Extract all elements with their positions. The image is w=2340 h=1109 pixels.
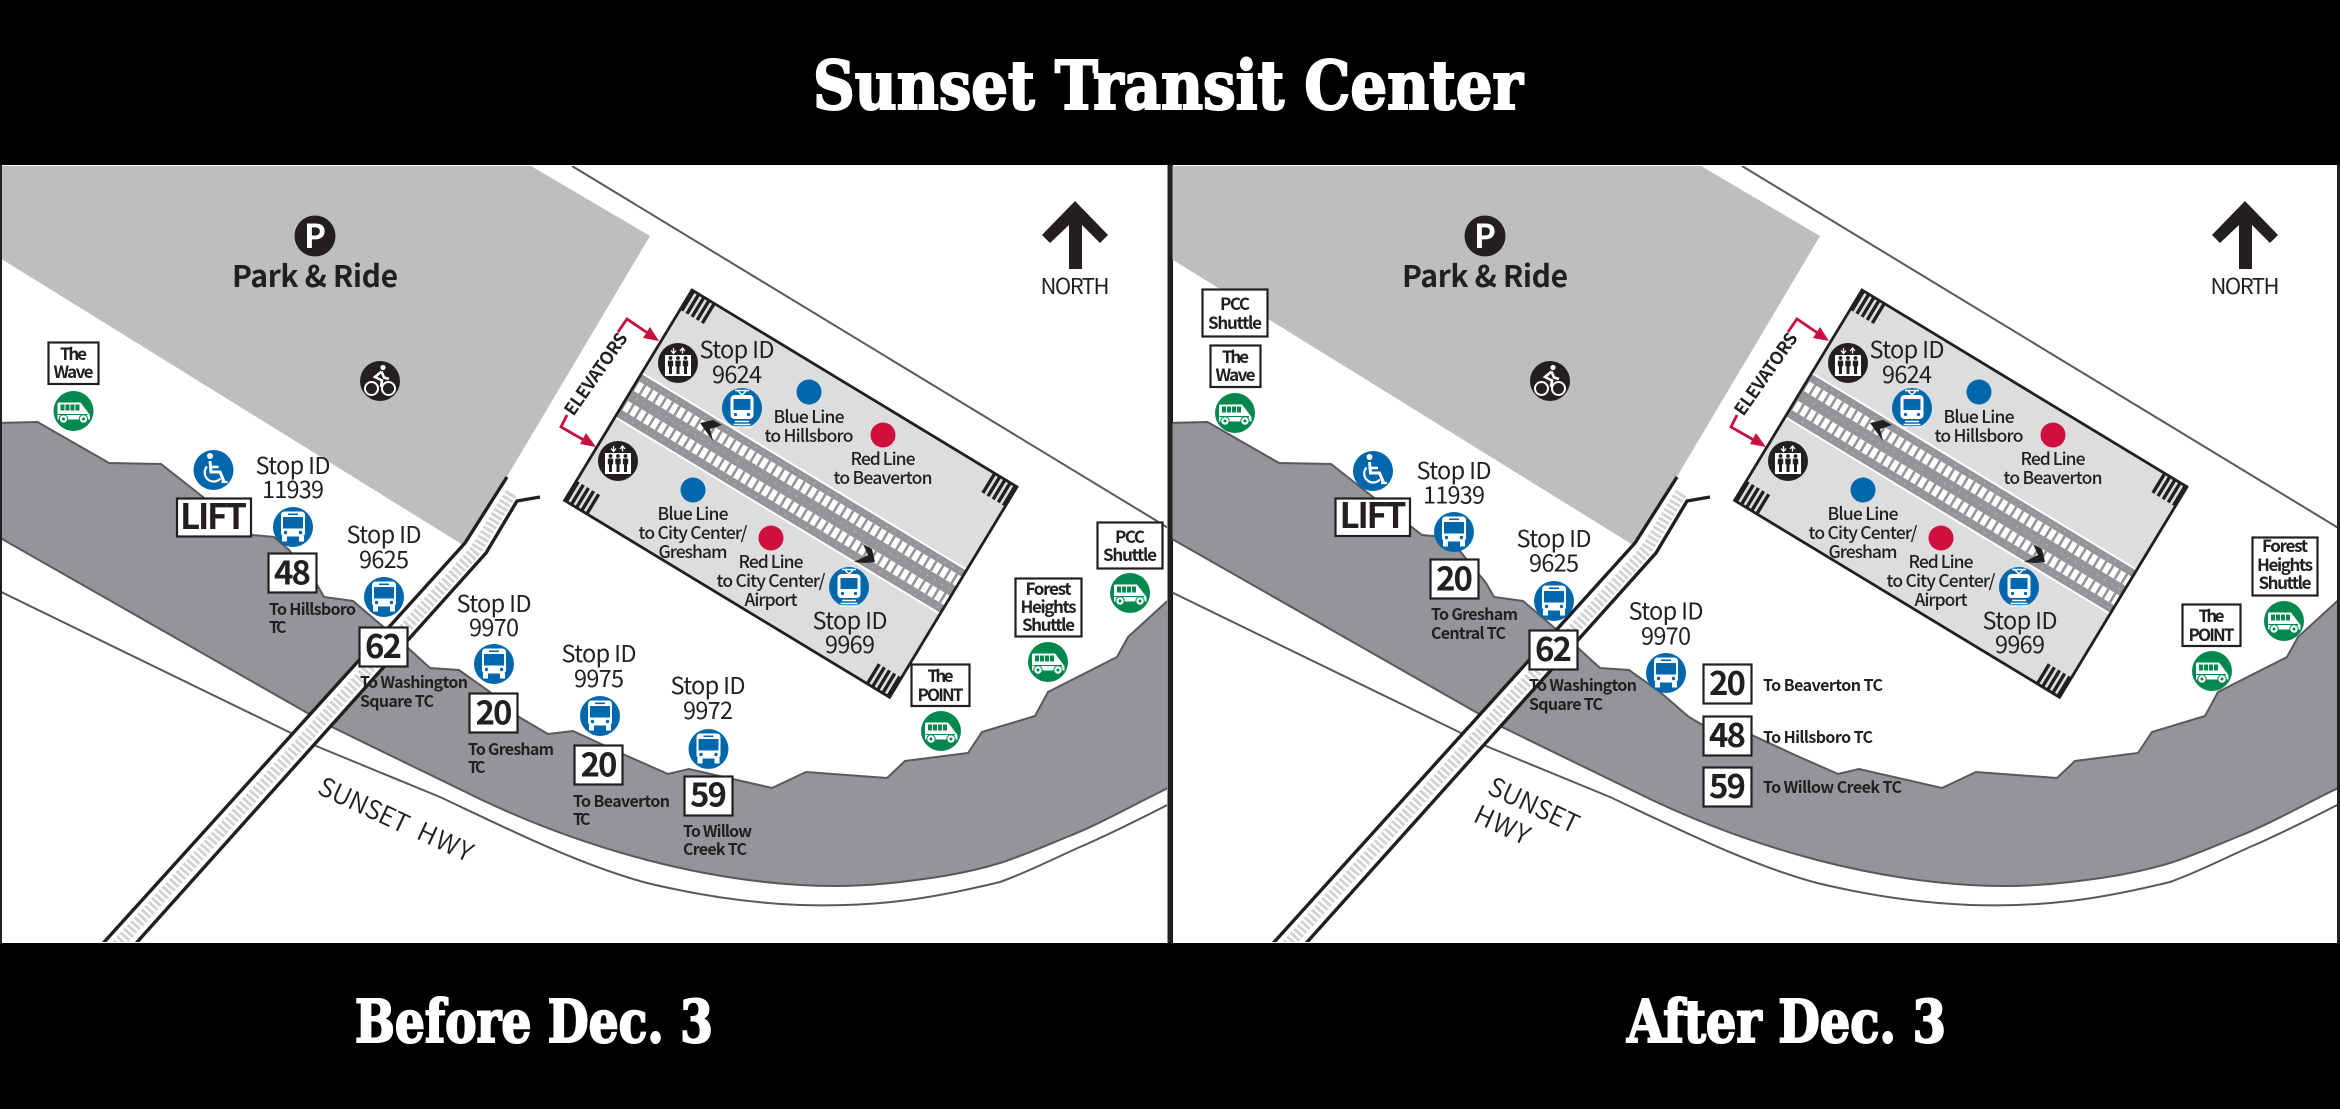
- stop 9625 line 62: Square TC: [360, 688, 434, 712]
- stop 9624 max station: [700, 331, 774, 428]
- stop 9975 line 20: 9975: [574, 660, 624, 694]
- stop 9969 max station: [1982, 567, 2058, 660]
- the point stop: [2182, 602, 2240, 691]
- stop 9624 max station: Stop ID: [700, 331, 774, 365]
- line 20 to Beaverton: 20: [1709, 657, 1746, 705]
- icon: elevator north: [1828, 343, 1868, 383]
- line 59 to Willow Creek: [1704, 760, 1902, 808]
- elevator arrows: [1731, 319, 1829, 447]
- stop 9969 max station: 9969: [825, 626, 875, 660]
- line 48 to Hillsboro: To Hillsboro TC: [1763, 724, 1874, 748]
- forest heights shuttle stop: Forest: [2262, 532, 2308, 557]
- stop 9969 max station: [812, 567, 888, 660]
- stop 11939 line 48: TC: [269, 614, 287, 638]
- stop 9625 line 62: 62: [1535, 623, 1572, 671]
- platform: [565, 290, 1017, 697]
- stop 9970 line 20: TC: [468, 754, 486, 778]
- the point stop: The: [2198, 602, 2225, 627]
- stop 9624 max station: [1870, 331, 1944, 428]
- north label: NORTH: [2210, 269, 2280, 301]
- panel: before Dec. 3 map: [0, 165, 1175, 950]
- highway label: HWY: [412, 812, 480, 870]
- red line to City Center: Red Line: [1908, 549, 1974, 574]
- stop 9975 line 20: Stop ID: [562, 635, 636, 669]
- icon: bike parking: [1530, 361, 1570, 401]
- stop 9625 line 62: 9625: [1529, 544, 1579, 578]
- the point stop: POINT: [918, 681, 964, 706]
- icon: elevator south: [598, 441, 638, 481]
- pcc shuttle label: Shuttle: [1208, 309, 1262, 334]
- north arrow: [2212, 201, 2278, 269]
- stop 11939 line 20: 20: [1436, 552, 1473, 600]
- the point stop: [912, 662, 970, 751]
- forest heights shuttle stop: Heights: [1020, 593, 1076, 618]
- the wave stop: The: [60, 340, 87, 365]
- blue line to Hillsboro: Blue Line: [774, 404, 845, 429]
- the point stop: The: [928, 662, 954, 687]
- lift stop: LIFT: [180, 489, 247, 540]
- icon: bike parking: [360, 361, 400, 401]
- red line to City Center: [716, 526, 826, 612]
- stop 9625 line 62: To Washington: [360, 669, 468, 693]
- red line to City Center: Airport: [1914, 587, 1968, 612]
- red line to City Center: to City Center/: [1886, 568, 1996, 593]
- forest heights shuttle stop: [2252, 532, 2318, 641]
- stop 11939 line 20: To Gresham: [1431, 601, 1518, 625]
- panel frame: [0, 165, 2340, 943]
- stop 9625 line 62: 9625: [359, 541, 409, 575]
- red line to Beaverton: to Beaverton: [834, 465, 932, 490]
- stop 9970 line 20: 20: [476, 686, 512, 734]
- stop 9975 line 20: [562, 635, 670, 830]
- parking lot, bus pavement, highway and rail: [0, 166, 1175, 950]
- blue line to City Center: [638, 478, 748, 564]
- stop 9975 line 20: TC: [573, 806, 591, 830]
- pcc shuttle stop: PCC: [1115, 523, 1145, 548]
- line 20 to Beaverton: To Beaverton TC: [1763, 672, 1884, 696]
- highway label: SUNSET: [313, 767, 416, 841]
- stop 11939 line 20: 11939: [1423, 476, 1485, 510]
- blue line to City Center: [1808, 478, 1918, 564]
- panel: after Dec. 3 map: [1165, 165, 2340, 950]
- stop 11939 line 48: To Hillsboro: [269, 596, 356, 620]
- pcc shuttle stop: [1098, 522, 1162, 613]
- stop 9972 line 59: 9972: [683, 692, 733, 726]
- forest heights shuttle stop: Shuttle: [1022, 611, 1075, 636]
- pcc shuttle label: [1202, 290, 1268, 336]
- platform: [1735, 290, 2187, 697]
- red line to Beaverton: [834, 422, 932, 490]
- forest heights shuttle stop: Forest: [1026, 575, 1072, 600]
- stop 9969 max station: Stop ID: [812, 602, 888, 636]
- line 48 to Hillsboro: [1704, 709, 1874, 757]
- stop 9969 max station: Stop ID: [1982, 602, 2058, 636]
- the wave stop: [48, 340, 98, 431]
- the wave stop: Wave: [1216, 361, 1256, 386]
- elevators label: ELEVATORS: [1728, 327, 1803, 420]
- forest heights shuttle stop: Shuttle: [2258, 569, 2312, 594]
- stop 9972 line 59: Creek TC: [683, 836, 748, 860]
- stop 9625 line 62: Stop ID: [1516, 520, 1592, 554]
- stop 9972 line 59: 59: [690, 768, 727, 816]
- stop 11939 line 20: Stop ID: [1416, 452, 1492, 486]
- stop 9970: Stop ID: [1628, 592, 1704, 626]
- park and ride label: Park & Ride: [232, 252, 398, 296]
- line 20 to Beaverton: [1704, 657, 1884, 705]
- blue line to City Center: Blue Line: [1828, 501, 1899, 526]
- stop 9970 line 20: [456, 585, 554, 778]
- stop 9970: [1628, 592, 1704, 693]
- park and ride label: Park & Ride: [1402, 252, 1568, 296]
- forest heights shuttle stop: Heights: [2257, 551, 2313, 576]
- blue line to Hillsboro: to Hillsboro: [1934, 423, 2024, 448]
- stop 11939 line 48: 11939: [262, 471, 324, 505]
- stop 9625 line 62: [1516, 520, 1637, 715]
- red line to Beaverton: Red Line: [2020, 446, 2086, 471]
- caption: before: Before Dec. 3: [355, 987, 713, 1056]
- pcc shuttle label: PCC: [1220, 290, 1250, 315]
- lift stop: [1336, 451, 1410, 539]
- icon: elevator north: [658, 343, 698, 383]
- stop 9972 line 59: [670, 667, 752, 860]
- blue line to City Center: Gresham: [658, 539, 728, 564]
- icon: parking: [1464, 210, 1506, 258]
- blue line to City Center: to City Center/: [638, 520, 748, 545]
- stop 9970 line 20: Stop ID: [456, 585, 532, 619]
- the wave stop: The: [1222, 343, 1249, 368]
- blue line to Hillsboro: [1934, 380, 2024, 448]
- stop 9624 max station: 9624: [1882, 356, 1932, 390]
- stop 9625 line 62: Square TC: [1529, 691, 1604, 715]
- highway label: HWY: [1469, 795, 1537, 853]
- lift stop: LIFT: [1340, 488, 1406, 539]
- caption: after: After Dec. 3: [1626, 987, 1946, 1056]
- forest heights shuttle stop: [1016, 575, 1082, 682]
- red line to City Center: Red Line: [738, 549, 804, 574]
- the point stop: POINT: [2188, 621, 2235, 646]
- red line to Beaverton: to Beaverton: [2004, 465, 2102, 490]
- blue line to City Center: to City Center/: [1808, 520, 1918, 545]
- stop 9625 line 62: To Washington: [1529, 672, 1637, 696]
- stop 9975 line 20: To Beaverton: [573, 788, 670, 812]
- stop 11939 line 48: Stop ID: [256, 447, 330, 481]
- blue line to Hillsboro: Blue Line: [1944, 404, 2015, 429]
- red line to Beaverton: [2004, 422, 2102, 490]
- title: Sunset Transit Center: [813, 46, 1524, 125]
- red line to City Center: Airport: [744, 587, 798, 612]
- the wave stop: [1210, 343, 1260, 433]
- line 48 to Hillsboro: 48: [1709, 709, 1746, 757]
- stop 9969 max station: 9969: [1995, 626, 2045, 660]
- red line to Beaverton: Red Line: [850, 446, 916, 471]
- lift stop: [177, 450, 251, 540]
- stop 11939 line 20: [1416, 452, 1518, 644]
- parking lot, bus pavement, highway and rail: [1165, 166, 2340, 950]
- stop 9624 max station: Stop ID: [1870, 331, 1944, 365]
- stop 9625 line 62: Stop ID: [346, 516, 422, 550]
- north label: NORTH: [1040, 269, 1110, 301]
- north arrow: [1042, 201, 1108, 269]
- red line to City Center: [1886, 526, 1996, 612]
- blue line to Hillsboro: to Hillsboro: [764, 423, 854, 448]
- red line to City Center: to City Center/: [716, 568, 826, 593]
- elevators label: ELEVATORS: [558, 327, 633, 420]
- panel background: [0, 165, 1168, 943]
- icon: parking: [294, 210, 336, 258]
- stop 9625 line 62: [346, 516, 468, 712]
- line 59 to Willow Creek: 59: [1709, 760, 1746, 808]
- panel background: [1173, 165, 2337, 943]
- elevator arrows: [561, 319, 659, 447]
- blue line to Hillsboro: [764, 380, 854, 448]
- stop 11939 line 48: 48: [274, 546, 311, 594]
- stop 9972 line 59: Stop ID: [670, 667, 746, 701]
- stop 11939 line 20: Central TC: [1431, 620, 1506, 644]
- stop 11939 line 48: [256, 447, 356, 638]
- stop 9970: 9970: [1641, 618, 1691, 652]
- stop 9970 line 20: 9970: [469, 609, 519, 643]
- highway label: [313, 767, 480, 870]
- blue line to City Center: Blue Line: [658, 501, 729, 526]
- stop 9625 line 62: 62: [365, 620, 402, 668]
- line 59 to Willow Creek: To Willow Creek TC: [1763, 774, 1902, 798]
- stop 9970 line 20: To Gresham: [468, 736, 554, 760]
- icon: parking: P: [304, 210, 326, 258]
- highway label: SUNSET: [1483, 767, 1586, 841]
- the wave stop: Wave: [54, 358, 94, 383]
- stop 9972 line 59: To Willow: [683, 818, 752, 842]
- icon: parking: P: [1474, 210, 1496, 258]
- blue line to City Center: Gresham: [1828, 539, 1898, 564]
- pcc shuttle stop: Shuttle: [1103, 541, 1157, 566]
- stop 9624 max station: 9624: [712, 356, 762, 390]
- icon: elevator south: [1768, 441, 1808, 481]
- stop 9975 line 20: 20: [580, 738, 618, 786]
